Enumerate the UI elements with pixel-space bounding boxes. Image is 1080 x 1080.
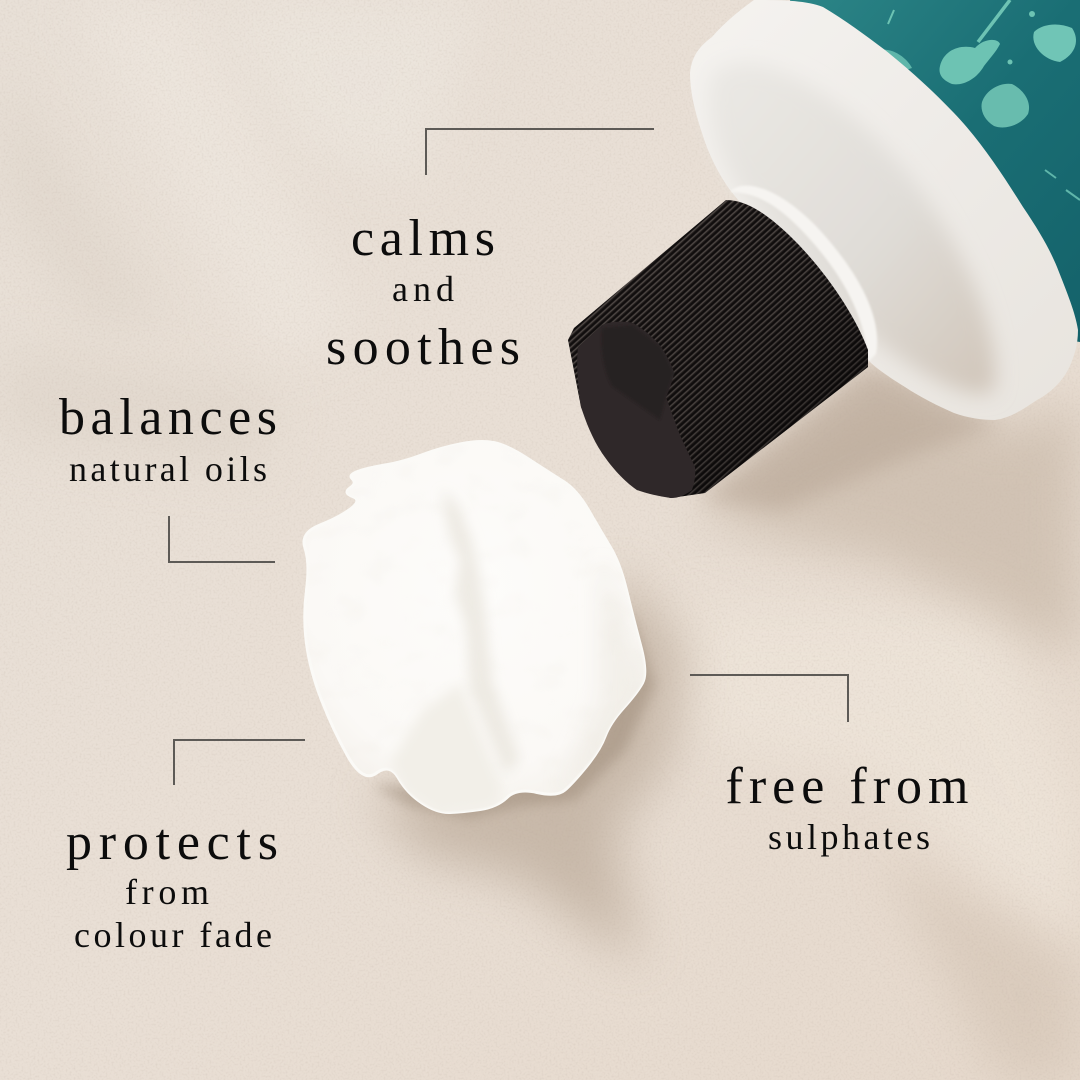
text: from: from — [125, 872, 209, 912]
connector line: balances — [169, 516, 275, 562]
shadow: cream cast shadow — [370, 570, 685, 965]
callout: balances natural oils — [59, 389, 277, 562]
cream fold shadow — [442, 490, 520, 775]
heading: balances: balances — [59, 389, 277, 446]
icon: teal bottle body with splatter pattern — [790, 0, 1080, 342]
heading: free from: free from — [726, 758, 968, 815]
connector line: free from — [690, 675, 848, 722]
icon: black ribbed nozzle — [568, 200, 868, 498]
text: colour fade: colour fade — [74, 915, 272, 955]
icon: cap neck ring — [730, 186, 877, 362]
text: and: and — [392, 269, 454, 309]
text: natural oils: natural oils — [69, 449, 267, 489]
connector line: calms — [426, 129, 654, 175]
heading: protects: protects — [66, 814, 278, 871]
heading: calms: calms — [351, 210, 495, 267]
shadow: bottle cast shadow — [690, 365, 1080, 660]
icon: white bottle cap disc — [690, 0, 1078, 420]
text: sulphates: sulphates — [768, 817, 930, 857]
illustration: cream swatch — [295, 435, 655, 820]
icon: nozzle thumb recess — [601, 325, 674, 420]
icon: nozzle flip top — [577, 322, 695, 498]
callout: protects from colour fade — [66, 740, 305, 955]
callout: free from sulphates — [690, 675, 968, 857]
callout: calms and soothes — [326, 129, 654, 376]
icon: cap recessed face — [709, 63, 995, 394]
connector line: protects — [174, 740, 305, 785]
cream lower layer under flap — [396, 688, 496, 809]
heading: soothes: soothes — [326, 319, 520, 376]
